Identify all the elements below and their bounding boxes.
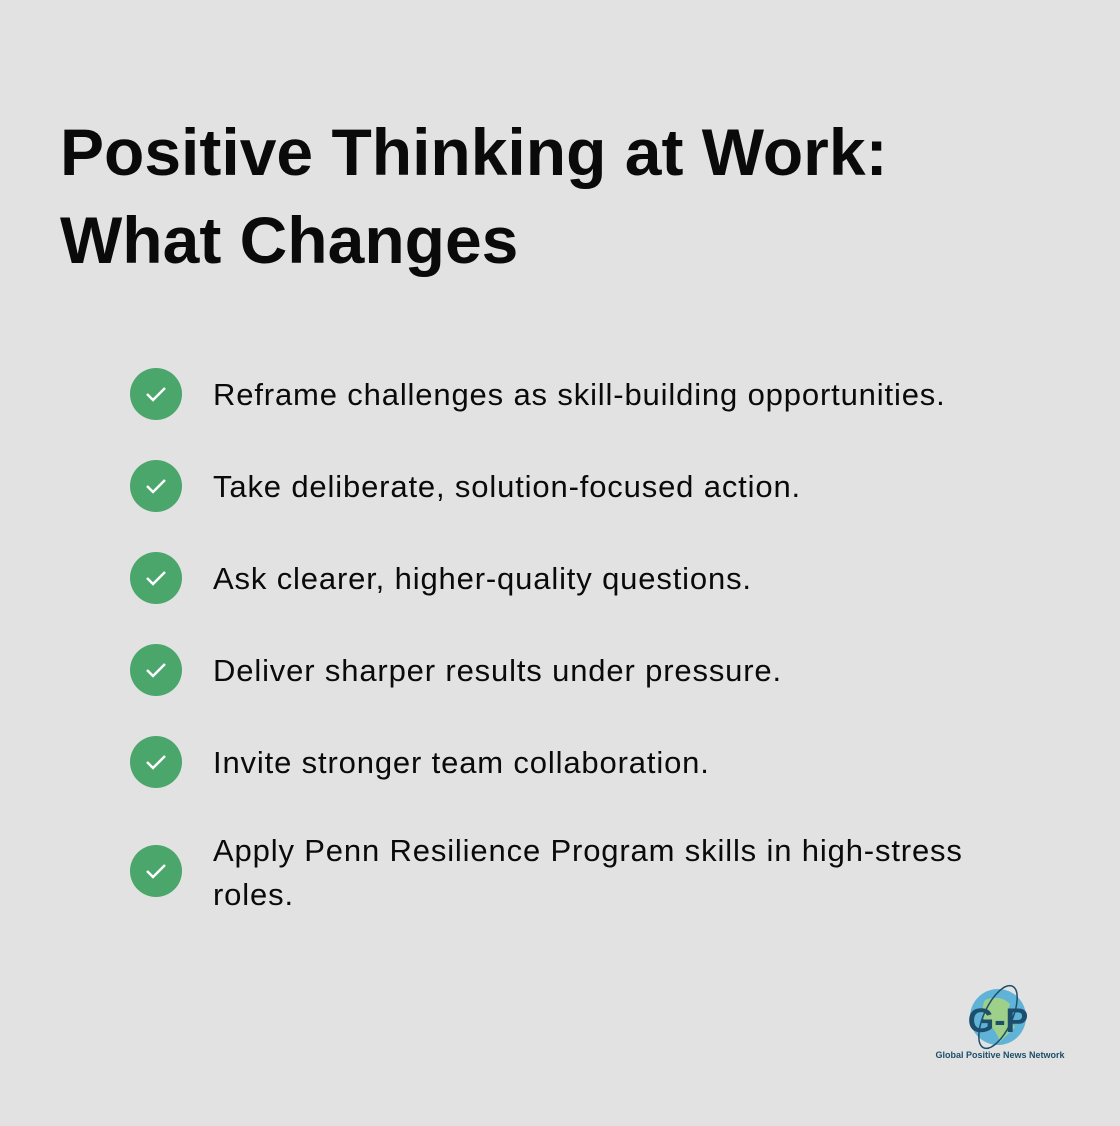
item 3 [130,552,752,604]
logo [935,984,1066,1060]
item 5 [130,736,710,788]
item 1: Reframe challenges as skill-building opportunities. [213,377,946,412]
item 6: roles. [213,877,294,912]
item 6: Apply Penn Resilience Program skills in high-stress [213,833,963,868]
item 2: Take deliberate, solution-focused action. [213,469,801,504]
item 4 [130,644,782,696]
title: What Changes [60,203,518,277]
item 2 [130,460,801,512]
logo: Global Positive News Network [935,1050,1066,1060]
logo: G-P [968,1002,1028,1040]
item 3: Ask clearer, higher-quality questions. [213,561,752,596]
item 5: Invite stronger team collaboration. [213,745,710,780]
title [60,115,888,277]
item 4: Deliver sharper results under pressure. [213,653,782,688]
item 6 [130,833,963,912]
title: Positive Thinking at Work: [60,115,888,189]
item 1 [130,368,946,420]
